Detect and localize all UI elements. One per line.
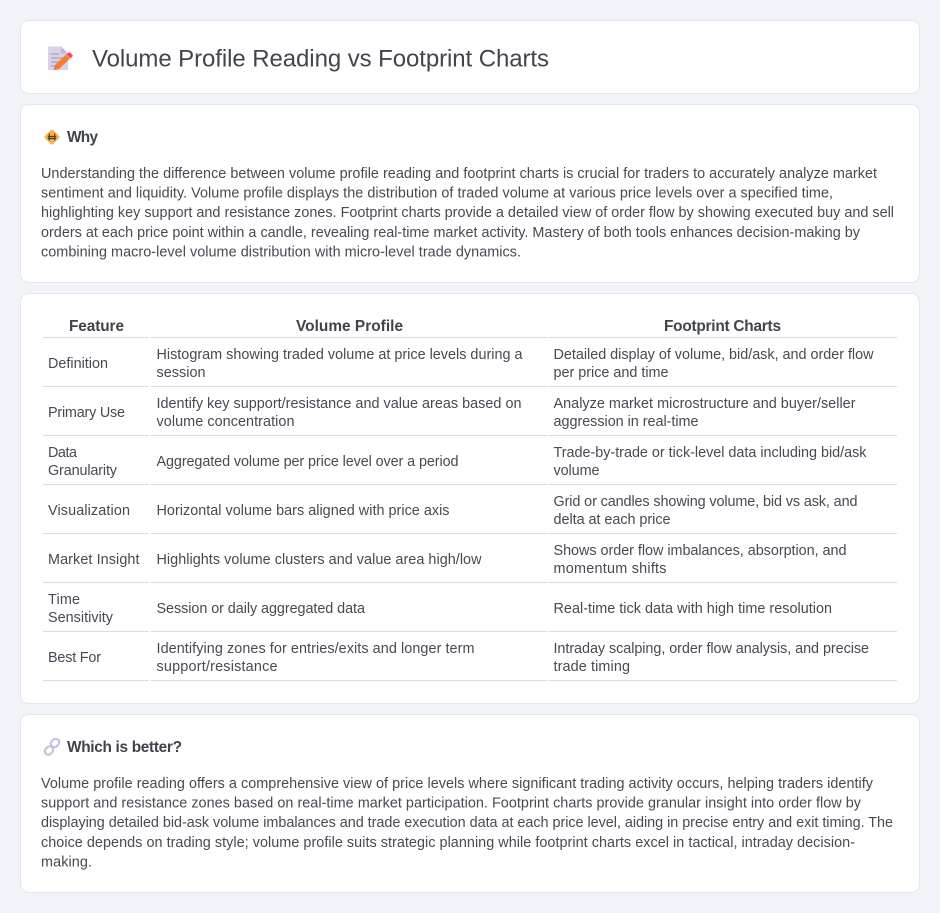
row: primary use: Analyze market microstructure and buyer/seller: [554, 396, 856, 412]
row: definition: Histogram showing traded volume at price levels during a: [156, 347, 522, 363]
row: visualization: Visualization: [48, 503, 130, 519]
row: best for: Identifying zones for entries/exits and longer term: [156, 641, 474, 657]
row: data granularity: [43, 445, 897, 485]
panel: why: [20, 104, 920, 282]
row: data granularity: Trade-by-trade or tick-level data including bid/ask: [554, 445, 867, 461]
icon: document with pencil: [48, 46, 73, 70]
row: definition: per price and time: [554, 365, 668, 381]
row: data granularity: volume: [554, 463, 600, 479]
row: best for: Intraday scalping, order flow analysis, and precise: [554, 641, 869, 657]
row: best for: Best For: [48, 650, 101, 666]
row: time sensitivity: Session or daily aggregated data: [156, 601, 365, 617]
row: primary use: [43, 396, 897, 436]
table header row: Volume Profile: [296, 318, 403, 335]
text block: why paragraph: highlighting key support and resistance zones. Footprint charts provide a detailed view of order flow by showing executed buy and sell: [41, 205, 894, 221]
text block: which is better paragraph: Volume profile reading offers a comprehensive view of price levels where significant trading activity occurs, helping traders identify: [41, 776, 874, 792]
row: definition: session: [156, 365, 206, 381]
table header row: [43, 318, 897, 338]
row: best for: support/resistance: [156, 659, 278, 675]
row: market insight: Highlights volume clusters and value area high/low: [156, 552, 482, 568]
text block: why paragraph: combining macro-level volume distribution with micro-level trade dynamics.: [41, 244, 521, 260]
row: primary use: Primary Use: [48, 405, 125, 421]
heading: why: Why: [67, 129, 98, 146]
table header row: Feature: [69, 318, 124, 335]
row: market insight: [43, 543, 897, 583]
text block: which is better paragraph: [41, 776, 893, 870]
row: visualization: delta at each price: [554, 512, 670, 528]
row: primary use: volume concentration: [156, 414, 294, 430]
row: visualization: Horizontal volume bars aligned with price axis: [156, 503, 450, 519]
row: time sensitivity: Sensitivity: [48, 610, 114, 626]
table header row: Footprint Charts: [664, 318, 781, 335]
row: primary use: Identify key support/resistance and value areas based on: [156, 396, 522, 412]
text block: why paragraph: Understanding the difference between volume profile reading and footprint charts is crucial for traders to accurately analyze market: [41, 166, 877, 182]
panel: title header: [20, 20, 920, 94]
heading: which is better: Which is better?: [67, 739, 182, 756]
row: data granularity: Aggregated volume per price level over a period: [156, 454, 458, 470]
row: definition: Detailed display of volume, bid/ask, and order flow: [554, 347, 874, 363]
row: primary use: aggression in real-time: [554, 414, 698, 430]
text block: why paragraph: sentiment and liquidity. Volume profile displays the distribution of traded volume at various price levels over a specified time,: [41, 186, 833, 202]
row: data granularity: Data: [48, 445, 77, 461]
row: time sensitivity: Time: [48, 592, 80, 608]
row: time sensitivity: [43, 592, 897, 632]
row: definition: Definition: [48, 356, 108, 372]
row: data granularity: Granularity: [48, 463, 118, 479]
row: visualization: [43, 494, 897, 534]
icon: orange diamond sign: [44, 129, 60, 145]
text block: which is better paragraph: support and resistance zones based on real-time market participation. Footprint charts provide granular insight into order flow by: [41, 796, 862, 812]
row: definition: [43, 347, 897, 387]
row: market insight: momentum shifts: [554, 561, 666, 577]
row: visualization: Grid or candles showing volume, bid vs ask, and: [554, 494, 858, 510]
row: market insight: Shows order flow imbalances, absorption, and: [554, 543, 846, 559]
row: time sensitivity: Real-time tick data with high time resolution: [554, 601, 832, 617]
text block: why paragraph: [41, 166, 894, 260]
icon: chain link: [43, 737, 61, 756]
row: market insight: Market Insight: [48, 552, 140, 568]
panel: comparison table: [20, 294, 920, 704]
text block: which is better paragraph: choice depends on trading style; volume profile suits strategic planning while footprint charts excel in tactical, intraday decision-: [41, 835, 855, 851]
row: best for: [43, 641, 897, 681]
panel: which is better: [20, 714, 920, 892]
text block: why paragraph: orders at each price point within a candle, revealing real-time market activity. Mastery of both tools enhances decision-making by: [41, 225, 861, 241]
text block: which is better paragraph: displaying detailed bid-ask volume imbalances and trade execution data at each price level, aiding in precise entry and exit timing. The: [41, 815, 893, 831]
row: best for: trade timing: [554, 659, 630, 675]
text block: which is better paragraph: making.: [41, 854, 92, 870]
title: Volume Profile Reading vs Footprint Charts: [92, 46, 549, 72]
